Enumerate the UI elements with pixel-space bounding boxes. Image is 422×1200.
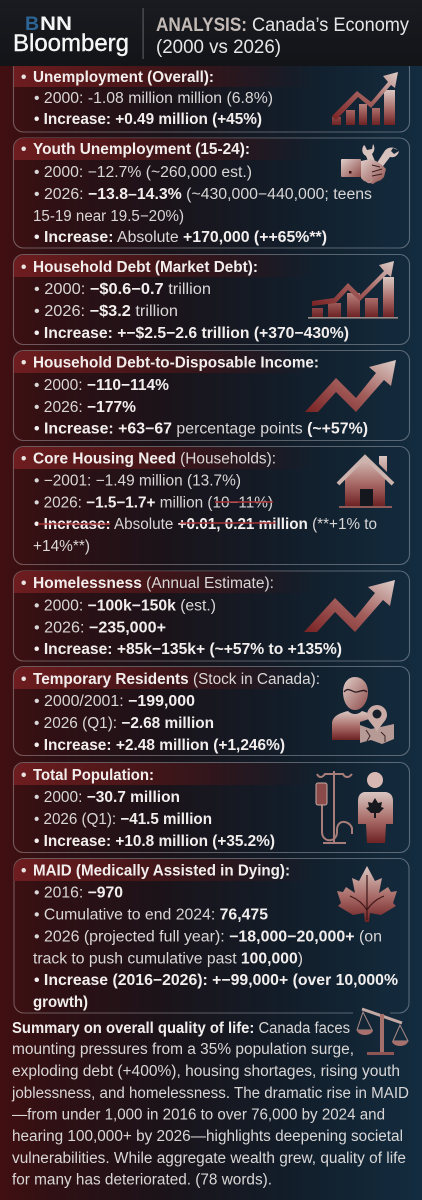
heading: household debt: • bbox=[21, 259, 26, 276]
summary text: Summary on overall quality of life: Canada faces bbox=[12, 1020, 350, 1037]
icon: rising bar chart bbox=[332, 72, 398, 125]
panel: youth unemployment bbox=[14, 138, 410, 248]
panel: MAID bbox=[14, 858, 409, 1013]
title bbox=[156, 15, 409, 58]
panel: debt to income bbox=[14, 350, 410, 440]
heading: temporary residents: Temporary Residents (Stock in Canada): bbox=[33, 671, 320, 688]
heading: core housing need: • bbox=[21, 450, 26, 468]
text block: MAID values: growth) bbox=[33, 994, 88, 1011]
summary text: mounting pressures from a 35% population surge, bbox=[12, 1041, 354, 1058]
icon: balance scale bbox=[357, 1009, 408, 1055]
text block: housing values bbox=[33, 472, 377, 555]
text block: residents values: • 2000/2001: −199,000 bbox=[34, 693, 195, 710]
heading: unemployment: • bbox=[21, 69, 26, 86]
icon: debt bar chart bbox=[308, 261, 398, 319]
summary text: hearing 100,000+ by 2026—highlights deepening societal bbox=[12, 1128, 403, 1145]
icon: person with map pin bbox=[332, 677, 394, 744]
text block: MAID values: • 2026 (projected full year): −18,000−20,000+ (on bbox=[34, 928, 382, 946]
heading: temporary residents: • bbox=[21, 671, 26, 688]
icon: IV stand and person bbox=[316, 771, 393, 843]
panel: temporary residents bbox=[14, 666, 410, 756]
text block: homelessness values: • Increase: +85k−135k+ (~+57% to +135%) bbox=[34, 641, 342, 658]
text block: homelessness values bbox=[34, 598, 342, 658]
text block: population values: • 2026 (Q1): −41.5 million bbox=[34, 811, 212, 828]
icon: hand holding wrench bbox=[341, 144, 399, 184]
heading: homelessness: Homelessness (Annual Estimate): bbox=[33, 575, 274, 592]
heading: youth unemployment: • bbox=[21, 141, 26, 158]
heading: youth unemployment: Youth Unemployment (15-24): bbox=[33, 141, 250, 158]
text block: household debt values: • 2000: −$0.6−0.7 trillion bbox=[34, 281, 211, 298]
summary text: joblessness, and homelessness. The dramatic rise in MAID bbox=[11, 1085, 409, 1102]
panel: unemployment overall bbox=[14, 58, 410, 132]
text block: population values: • Increase: +10.8 million (+35.2%) bbox=[34, 833, 275, 850]
text block: homelessness values: • 2026: −235,000+ bbox=[34, 620, 166, 636]
text block: debt to income values: • 2026: −177% bbox=[34, 399, 136, 416]
text block: youth unemployment values bbox=[33, 164, 372, 246]
text block: housing values: • Increase: Absolute +0.01, 0.21 million (**+1% to bbox=[34, 516, 377, 533]
icon: maple leaf bbox=[337, 866, 397, 922]
text block: household debt values: • Increase: +−$2.5−2.6 trillion (+370−430%) bbox=[34, 325, 349, 342]
header band bbox=[0, 0, 422, 66]
text block: youth unemployment values: 15-19 near 19.5−20%) bbox=[33, 208, 184, 225]
text block: debt to income values: • Increase: +63−67 percentage points (~+57%) bbox=[34, 420, 368, 438]
panel: core housing need bbox=[14, 446, 410, 564]
heading: debt to income: • bbox=[21, 354, 26, 372]
heading: homelessness: • bbox=[21, 575, 26, 592]
text block: MAID values: • 2016: −970 bbox=[34, 884, 123, 902]
title: ANALYSIS: bbox=[156, 15, 247, 36]
heading: MAID: MAID (Medically Assisted in Dying): bbox=[33, 862, 290, 880]
text block: MAID values bbox=[33, 884, 398, 1011]
text block: MAID values: • Increase (2016−2026): +−99,000+ (over 10,000% bbox=[34, 972, 398, 989]
text block: unemployment values: • Increase: +0.49 million (+45%) bbox=[34, 111, 262, 128]
text block: MAID values: track to push cumulative past 100,000) bbox=[33, 950, 303, 968]
text block: homelessness values: • 2000: −100k−150k (est.) bbox=[34, 598, 216, 614]
title: Canada’s Economy bbox=[252, 15, 409, 36]
logo: BNN Bloomberg: NN bbox=[40, 13, 72, 35]
text block: housing values: • −2001: −1.49 million (13.7%) bbox=[34, 472, 241, 490]
panel: total population bbox=[14, 762, 410, 852]
summary text: exploding debt (+400%), housing shortages, rising youth bbox=[12, 1063, 400, 1080]
logo: BNN Bloomberg: Bloomberg bbox=[13, 30, 129, 57]
heading: total population: Total Population: bbox=[33, 767, 154, 784]
icon: rising arrow bbox=[305, 360, 396, 412]
text block: youth unemployment values: • 2000: −12.7% (~260,000 est.) bbox=[34, 164, 252, 181]
text block: MAID values: • Cumulative to end 2024: 76,475 bbox=[34, 906, 268, 924]
logo: BNN Bloomberg bbox=[13, 13, 129, 57]
heading: unemployment: Unemployment (Overall): bbox=[33, 69, 214, 86]
heading: core housing need: Core Housing Need (Households): bbox=[33, 450, 276, 468]
text block: housing values: +14%**) bbox=[33, 538, 90, 555]
summary text: vulnerabilities. While aggregate wealth grew, quality of life bbox=[12, 1150, 406, 1167]
icon: rising arrow bbox=[304, 580, 395, 632]
heading: household debt: Household Debt (Market Debt): bbox=[33, 259, 258, 276]
heading: total population: • bbox=[21, 767, 26, 784]
heading: debt to income: Household Debt-to-Disposable Income: bbox=[33, 354, 319, 372]
text block: unemployment values: • 2000: -1.08 million million (6.8%) bbox=[34, 90, 273, 107]
summary text: for many has deteriorated. (78 words). bbox=[12, 1172, 272, 1188]
text block: debt to income values bbox=[34, 377, 368, 438]
summary text: —from under 1,000 in 2016 to over 76,000 by 2024 and bbox=[12, 1106, 385, 1124]
text block: residents values: • Increase: +2.48 million (+1,246%) bbox=[34, 737, 285, 754]
text block: household debt values: • 2026: −$3.2 trillion bbox=[34, 303, 178, 320]
text block: population values: • 2000: −30.7 million bbox=[34, 789, 180, 806]
text block: residents values: • 2026 (Q1): −2.68 million bbox=[34, 715, 214, 732]
icon: house bbox=[338, 456, 393, 508]
title: (2000 vs 2026) bbox=[156, 37, 281, 58]
text block: housing values: • 2026: −1.5−1.7+ million (10−11%) bbox=[34, 494, 273, 512]
text block: household debt values bbox=[34, 281, 349, 342]
heading: MAID: • bbox=[21, 862, 26, 880]
text block: youth unemployment values: • Increase: Absolute +170,000 (++65%**) bbox=[34, 229, 327, 246]
panel: household debt bbox=[14, 254, 410, 344]
text block: debt to income values: • 2000: −110−114% bbox=[34, 377, 169, 394]
text block: population values bbox=[34, 789, 275, 850]
panel: homelessness bbox=[14, 571, 410, 661]
logo: BNN Bloomberg: B bbox=[25, 13, 39, 35]
summary text bbox=[11, 1020, 409, 1188]
text block: youth unemployment values: • 2026: −13.8–14.3% (~430,000−440,000; teens bbox=[34, 186, 372, 203]
text block: residents values bbox=[34, 693, 285, 754]
text block: unemployment values bbox=[34, 90, 273, 128]
